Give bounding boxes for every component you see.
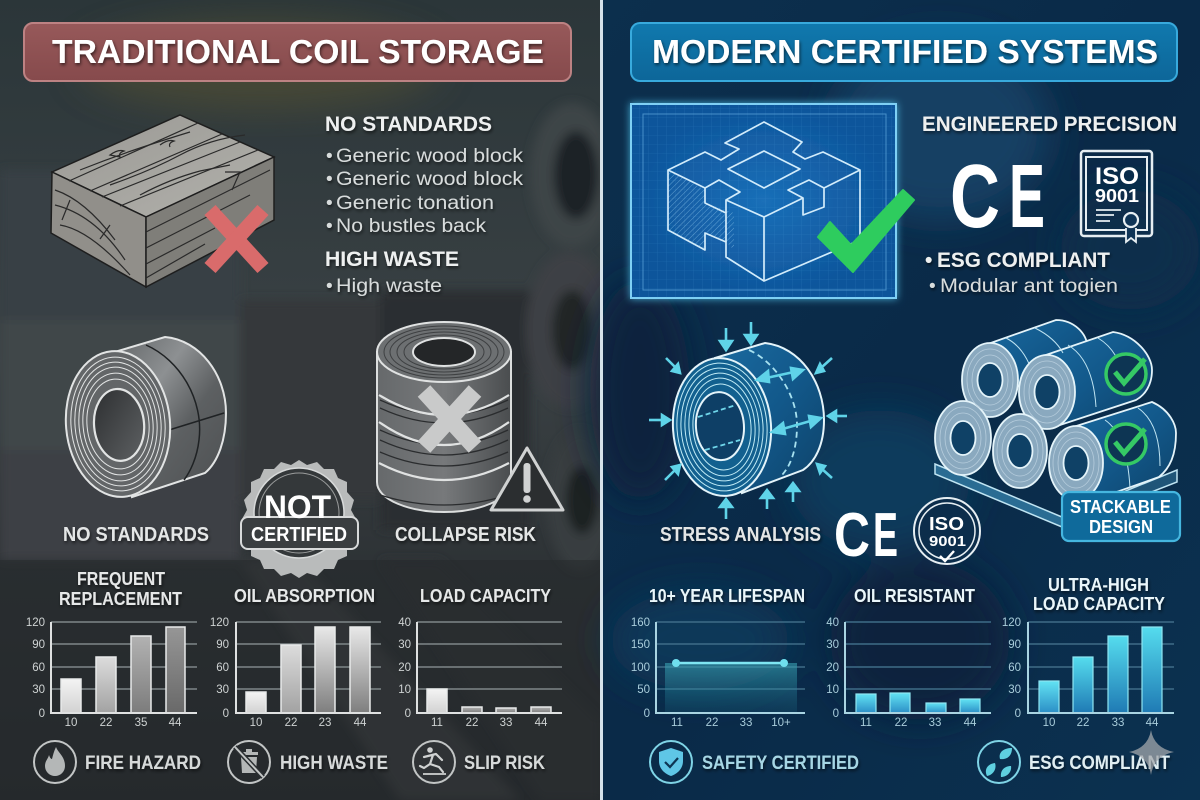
icon: fire hazard — [34, 741, 76, 783]
bar chart: load capacity: 40 — [398, 617, 411, 629]
bar chart: oil resistant: 33 — [929, 717, 941, 729]
text block: no standards: • — [326, 193, 333, 214]
bar chart: frequent replacement: 35 — [135, 717, 147, 729]
line chart: 10+ year lifespan — [631, 617, 805, 729]
bar chart: load capacity: 20 — [398, 662, 411, 674]
chart title: load capacity: LOAD CAPACITY — [420, 586, 551, 606]
text block: no standards: • — [326, 216, 333, 237]
bar chart: load capacity: 0 — [405, 708, 411, 720]
line chart: 10+ year lifespan: 33 — [740, 717, 752, 729]
bar chart: load capacity: 44 — [535, 717, 548, 729]
bar chart: oil absorption: 0 — [223, 708, 229, 720]
icon: sparkle watermark — [1129, 730, 1174, 775]
chart title: oil resistant: OIL RESISTANT — [854, 586, 975, 606]
icon: coil stress analysis — [649, 322, 847, 519]
icon: wood block with red x — [51, 115, 274, 287]
callout: stackable design: DESIGN — [1089, 517, 1153, 537]
icon: iso 9001 certificate: ISO — [1095, 163, 1139, 190]
icon: small ce mark: C — [834, 501, 870, 570]
text block: esg compliant — [925, 249, 1118, 297]
line chart: 10+ year lifespan: 10+ — [771, 717, 791, 729]
text block: high waste: HIGH WASTE — [325, 248, 459, 271]
panel: traditional coil storage — [0, 0, 614, 800]
icon: iso 9001 certificate: 9001 — [1095, 186, 1139, 206]
label: collapse risk: COLLAPSE RISK — [395, 524, 536, 546]
text block: no standards: Generic wood block — [336, 146, 524, 167]
bar chart: frequent replacement: 44 — [169, 717, 182, 729]
heading: engineered precision: ENGINEERED PRECISION — [922, 113, 1177, 136]
bar chart: oil resistant: 40 — [826, 617, 839, 629]
text block: no standards: • — [326, 169, 333, 190]
icon: ce mark: C — [950, 147, 1000, 247]
icon: safety shield — [650, 741, 692, 783]
bar chart: oil resistant — [826, 617, 991, 729]
line chart: 10+ year lifespan: 160 — [631, 617, 650, 629]
icon: plain steel coil — [60, 337, 226, 501]
bar chart: oil absorption: 90 — [216, 639, 229, 651]
bar chart: frequent replacement: 30 — [32, 684, 45, 696]
bar chart: load capacity: 22 — [466, 717, 478, 729]
chart title: ultra-high load capacity — [1033, 575, 1165, 614]
bar chart: ultra-high load capacity: 90 — [1008, 639, 1021, 651]
icon: ce mark: E — [1009, 147, 1045, 247]
bar chart: frequent replacement: 10 — [65, 717, 77, 729]
callout: stackable design: STACKABLE — [1070, 497, 1171, 517]
bar chart: ultra-high load capacity: 120 — [1002, 617, 1021, 629]
text block: no standards: • — [326, 146, 333, 167]
label: fire hazard: FIRE HAZARD — [85, 753, 201, 774]
heading: modern certified systems: MODERN CERTIFIED SYSTEMS — [652, 33, 1158, 70]
icon: esg leaves — [978, 741, 1020, 783]
text block: no standards: No bustles back — [336, 216, 487, 237]
text block: no standards: NO STANDARDS — [325, 113, 492, 136]
chart title: ultra-high load capacity: ULTRA-HIGH — [1048, 575, 1149, 595]
heading: traditional coil storage: TRADITIONAL COIL STORAGE — [52, 33, 544, 70]
text block: esg compliant: Modular ant togien — [940, 276, 1118, 297]
icon: iso 9001 round badge — [914, 498, 980, 564]
bar chart: oil absorption: 30 — [216, 684, 229, 696]
icon: iso 9001 round badge: ISO — [929, 514, 964, 534]
bar chart: oil absorption: 120 — [210, 617, 229, 629]
bar chart: oil resistant: 30 — [826, 639, 839, 651]
text block: high waste: • — [326, 276, 333, 297]
bar chart: load capacity: 10 — [398, 684, 411, 696]
chart title: oil absorption: OIL ABSORPTION — [234, 586, 375, 606]
callout: stackable design — [1062, 492, 1180, 541]
icon: ce mark — [950, 147, 1045, 247]
text block: no standards — [325, 113, 524, 237]
bar chart: load capacity: 30 — [398, 639, 411, 651]
icon: iso 9001 round badge: 9001 — [929, 533, 966, 550]
bar chart: ultra-high load capacity: 22 — [1077, 717, 1089, 729]
icon: small ce mark — [834, 501, 898, 570]
bar chart: load capacity: 11 — [431, 717, 443, 729]
text block: esg compliant: ESG COMPLIANT — [937, 249, 1110, 272]
bar chart: oil resistant: 11 — [860, 717, 872, 729]
bar chart: oil absorption: 23 — [319, 717, 331, 729]
bar chart: ultra-high load capacity: 60 — [1008, 662, 1021, 674]
bar chart: frequent replacement: 22 — [100, 717, 112, 729]
badge: not certified: CERTIFIED — [251, 524, 347, 546]
bar chart: ultra-high load capacity: 10 — [1043, 717, 1055, 729]
icon: iso 9001 certificate — [1081, 151, 1152, 242]
label: no standards: NO STANDARDS — [63, 524, 209, 546]
bar chart: frequent replacement: 0 — [39, 708, 45, 720]
line chart: 10+ year lifespan: 150 — [631, 639, 650, 651]
badge: not certified: NOT — [264, 489, 331, 525]
bar chart: oil resistant: 0 — [833, 708, 839, 720]
text block: high waste: High waste — [336, 276, 442, 297]
line chart: 10+ year lifespan: 0 — [644, 708, 650, 720]
bar chart: load capacity: 33 — [500, 717, 512, 729]
panel: modern certified systems — [590, 0, 1200, 800]
bar chart: ultra-high load capacity: 30 — [1008, 684, 1021, 696]
icon: stacked coil with x and warning — [377, 322, 563, 512]
bar chart: ultra-high load capacity — [1002, 617, 1174, 729]
chart title: frequent replacement: REPLACEMENT — [59, 589, 182, 609]
icon: high waste — [228, 741, 270, 783]
heading: modern certified systems — [631, 23, 1177, 81]
line chart: 10+ year lifespan: 50 — [637, 684, 650, 696]
bar chart: frequent replacement: 90 — [32, 639, 45, 651]
label: esg compliant: ESG COMPLIANT — [1029, 753, 1170, 774]
text block: esg compliant: • — [929, 276, 936, 297]
bar chart: ultra-high load capacity: 0 — [1015, 708, 1021, 720]
bar chart: oil absorption: 22 — [285, 717, 297, 729]
bar chart: frequent replacement: 120 — [26, 617, 45, 629]
bar chart: oil resistant: 20 — [826, 662, 839, 674]
bar chart: load capacity — [398, 617, 562, 729]
line chart: 10+ year lifespan: 22 — [706, 717, 718, 729]
bar chart: oil absorption — [210, 617, 381, 729]
chart title: frequent replacement — [59, 569, 182, 609]
text block: high waste — [325, 248, 459, 297]
chart title: ultra-high load capacity: LOAD CAPACITY — [1033, 594, 1165, 614]
label: high waste: HIGH WASTE — [280, 753, 388, 774]
label: slip risk: SLIP RISK — [464, 753, 545, 774]
icon: small ce mark: E — [873, 501, 898, 570]
line chart: 10+ year lifespan: 11 — [671, 717, 683, 729]
bar chart: frequent replacement — [26, 617, 197, 729]
bar chart: oil absorption: 44 — [354, 717, 367, 729]
bar chart: oil resistant: 10 — [826, 684, 839, 696]
label: safety certified: SAFETY CERTIFIED — [702, 753, 859, 774]
bar chart: oil resistant: 22 — [895, 717, 907, 729]
icon: stacked coils on pallet — [935, 320, 1177, 527]
icon: slip risk — [413, 741, 455, 783]
bar chart: oil resistant: 44 — [964, 717, 977, 729]
label: stress analysis: STRESS ANALYSIS — [660, 524, 821, 546]
line chart: 10+ year lifespan: 100 — [631, 662, 650, 674]
bar chart: frequent replacement: 60 — [32, 662, 45, 674]
text block: esg compliant: • — [925, 249, 932, 272]
text block: no standards: Generic tonation — [336, 193, 494, 214]
bar chart: oil absorption: 60 — [216, 662, 229, 674]
heading: traditional coil storage — [24, 23, 571, 81]
text block: no standards: Generic wood block — [336, 169, 524, 190]
bar chart: ultra-high load capacity: 33 — [1112, 717, 1124, 729]
badge: not certified — [241, 460, 358, 578]
blueprint: modular block with check — [631, 104, 914, 298]
bar chart: ultra-high load capacity: 44 — [1146, 717, 1159, 729]
bar chart: oil absorption: 10 — [250, 717, 262, 729]
chart title: 10+ year lifespan: 10+ YEAR LIFESPAN — [649, 586, 805, 606]
chart title: frequent replacement: FREQUENT — [77, 569, 165, 589]
